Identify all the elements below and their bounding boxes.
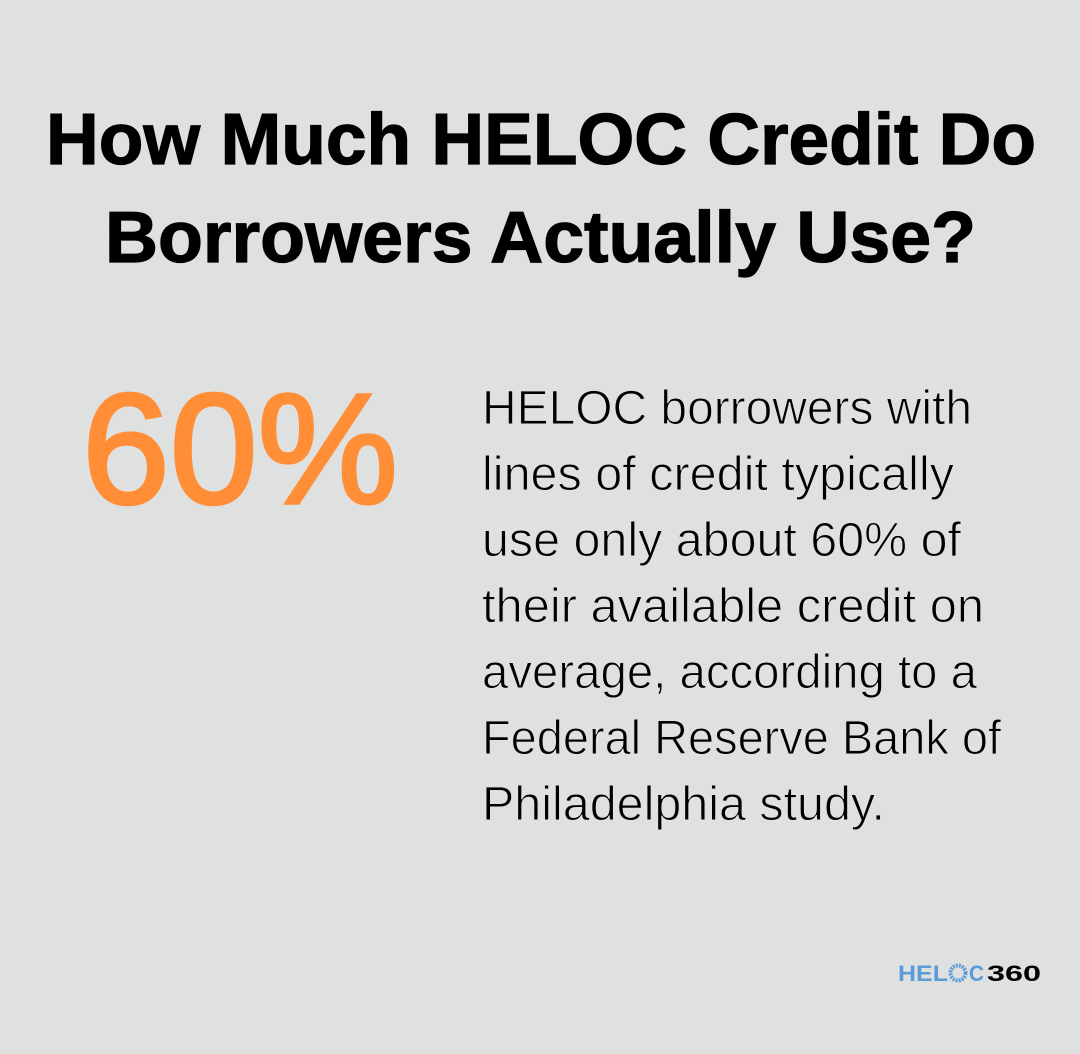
logo: HELOC360: C bbox=[969, 961, 984, 986]
title: Borrowers Actually Use? bbox=[105, 198, 976, 278]
description text block bbox=[482, 382, 1002, 831]
description text block: HELOC borrowers with bbox=[482, 382, 972, 435]
description text block: Philadelphia study. bbox=[482, 778, 885, 831]
title: How Much HELOC Credit Do bbox=[46, 100, 1036, 180]
logo: HELOC360: HEL bbox=[898, 961, 948, 986]
icon: logo swirl ring bbox=[950, 966, 966, 980]
logo: HELOC360: 360 bbox=[987, 961, 1041, 986]
description text block: their available credit on bbox=[482, 580, 984, 633]
description text block: Federal Reserve Bank of bbox=[482, 712, 1002, 765]
description text block: average, according to a bbox=[482, 646, 977, 699]
description text block: lines of credit typically bbox=[482, 448, 954, 501]
title bbox=[46, 100, 1036, 278]
logo: HELOC360 bbox=[898, 961, 1041, 986]
big statistic: 60%: 60% bbox=[82, 362, 398, 537]
description text block: use only about 60% of bbox=[482, 514, 962, 567]
